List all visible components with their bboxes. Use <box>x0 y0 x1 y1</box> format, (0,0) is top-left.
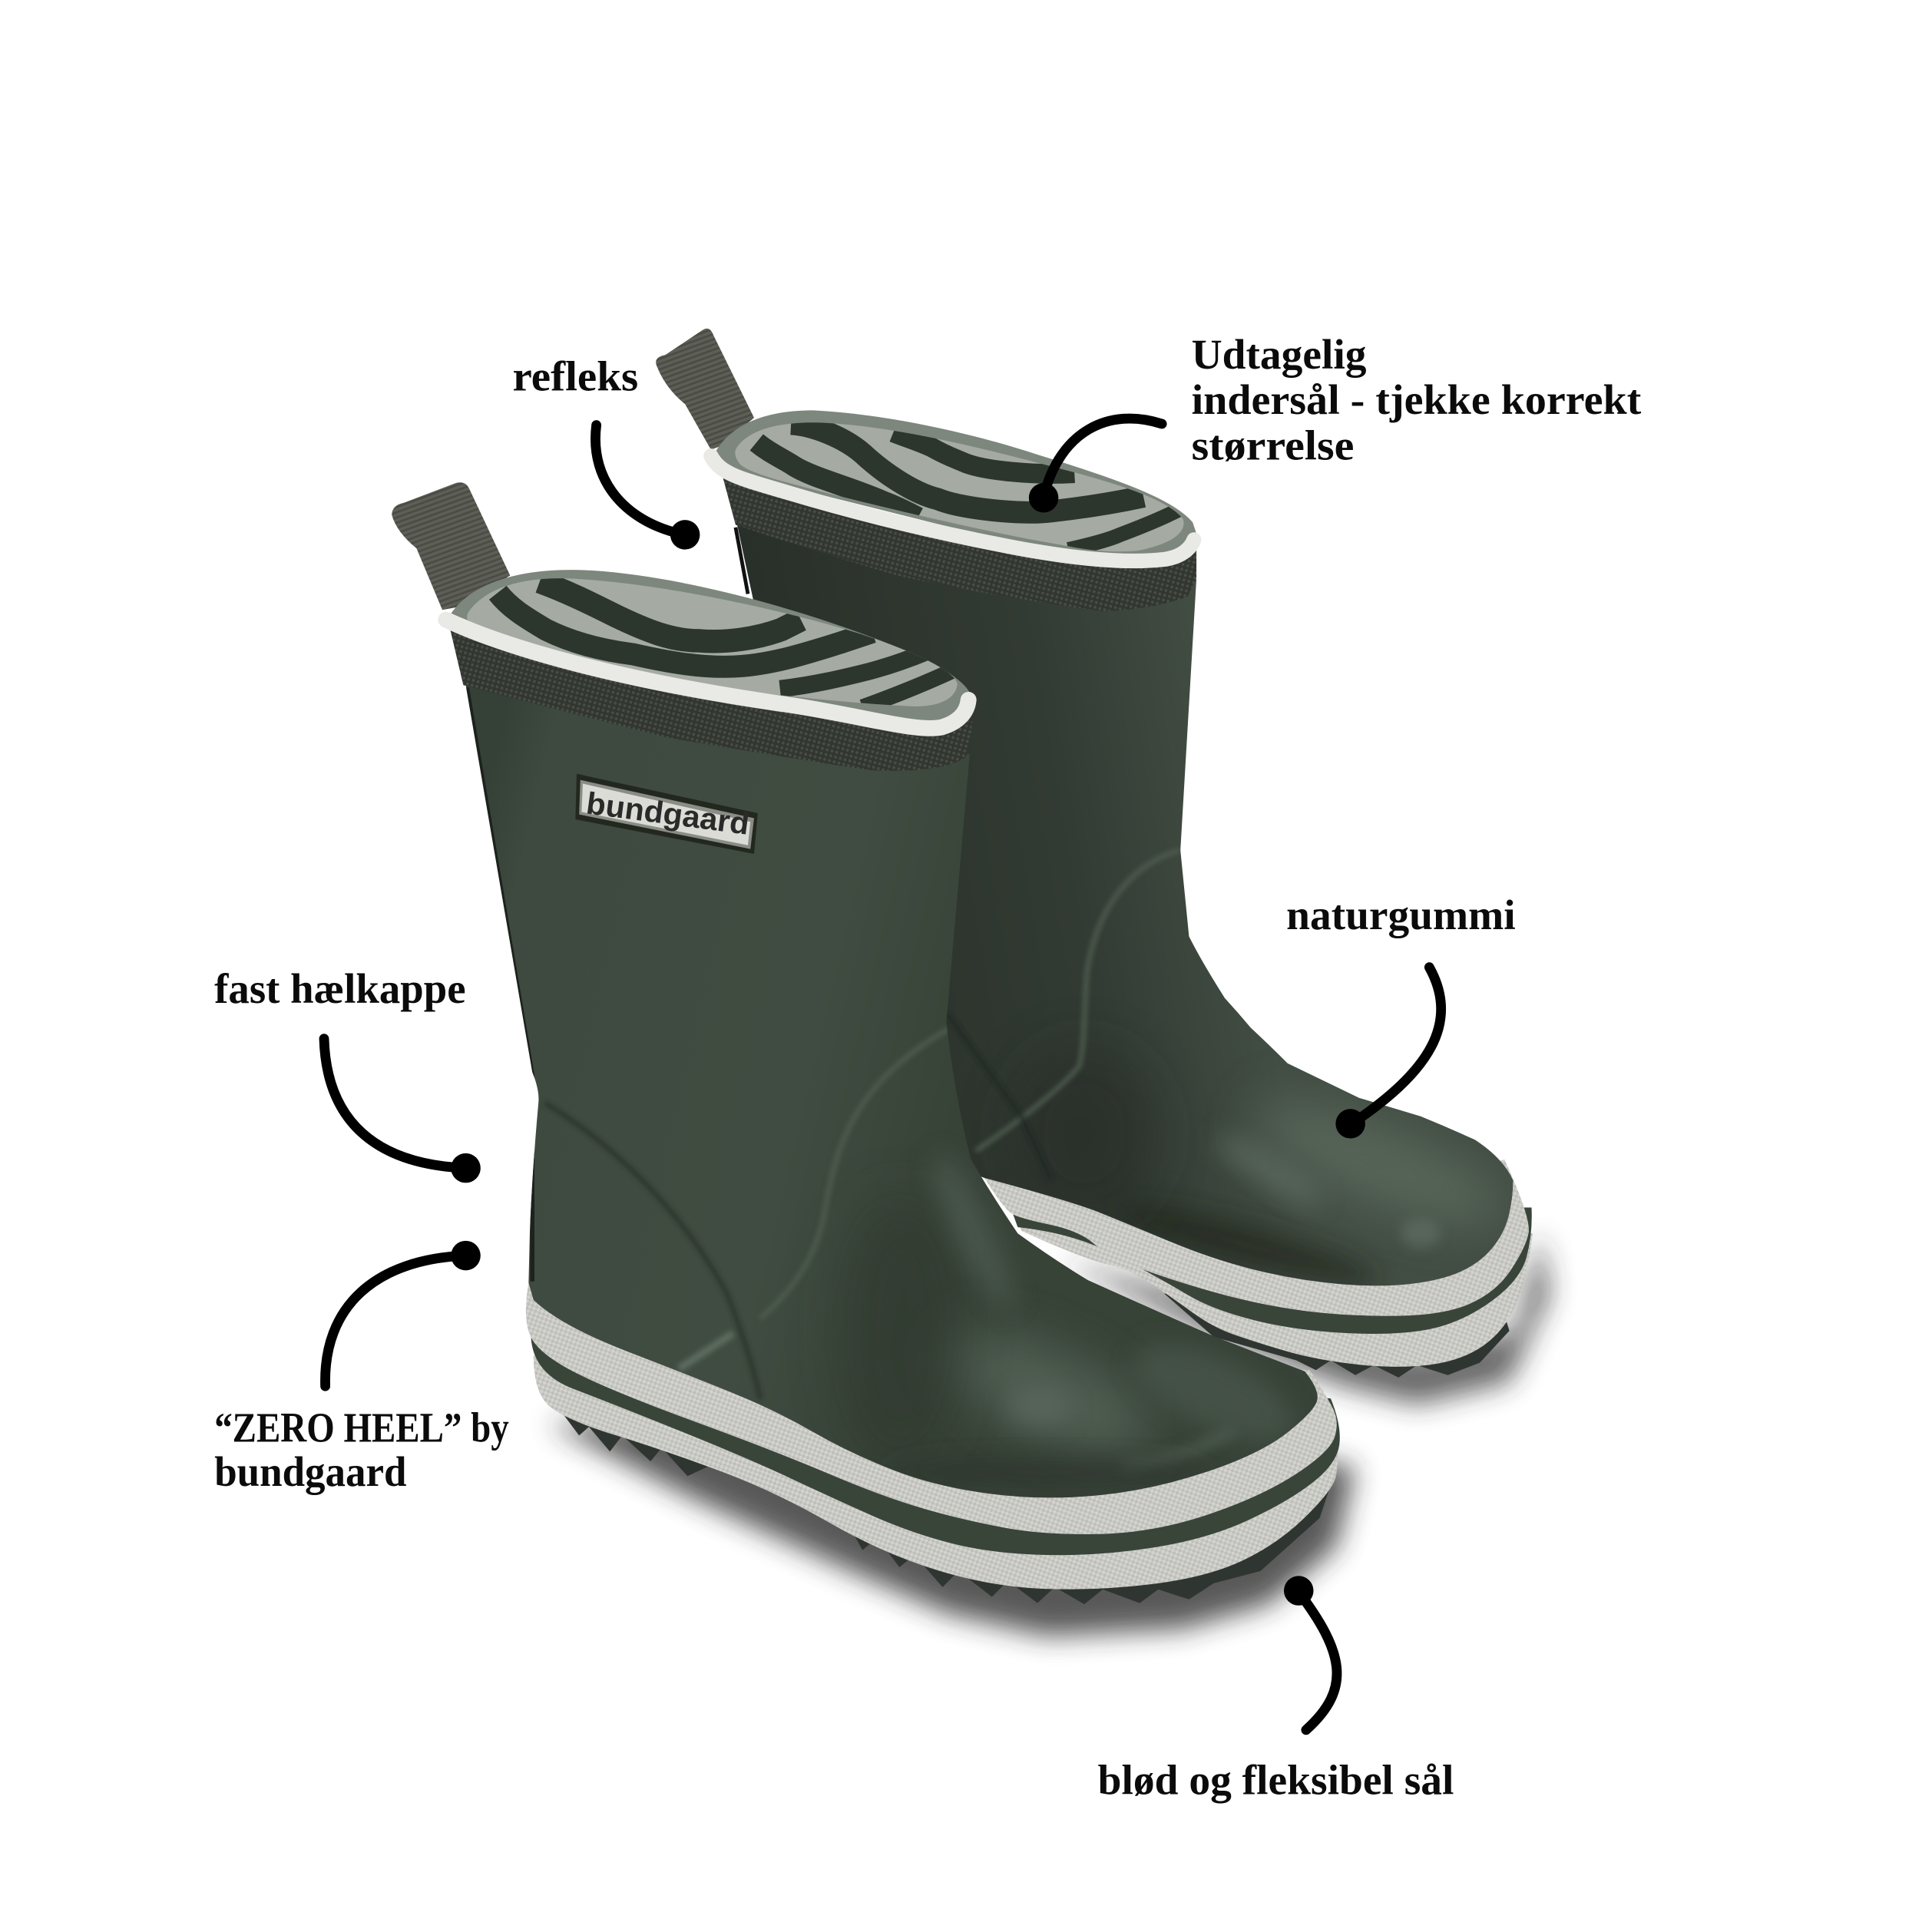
callout: blød og fleksibel sål <box>1098 1576 1454 1803</box>
callout: Udtagelig indersål: størrelse <box>1192 422 1354 469</box>
callout: ZERO HEEL: “ZERO HEEL” by <box>214 1404 509 1451</box>
front boot textured collar <box>448 622 972 771</box>
rear boot <box>656 329 1550 1404</box>
rear boot strap <box>656 329 754 450</box>
callout: ZERO HEEL: bundgaard <box>214 1448 407 1495</box>
front boot shading <box>467 687 1306 1488</box>
callout: ZERO HEEL <box>214 1241 509 1495</box>
front boot upper sole stripe <box>526 1282 1337 1534</box>
brand badge <box>575 774 758 854</box>
rear boot white rim <box>711 456 1194 561</box>
rear boot shading <box>946 850 1520 1298</box>
rear boot body <box>736 518 1513 1285</box>
rear boot inner lining <box>712 410 1198 560</box>
callout: Udtagelig indersål: Udtagelig <box>1192 331 1366 378</box>
rear boot lower sole stripe <box>1017 1207 1533 1367</box>
rear boot heel edge <box>736 528 748 594</box>
callout: refleks: refleks <box>513 353 638 400</box>
front boot body <box>466 685 1318 1497</box>
rear boot shadow <box>1060 1232 1550 1404</box>
front boot <box>392 482 1355 1636</box>
front boot strap <box>392 482 510 610</box>
callout: fast hælkappe: fast hælkappe <box>214 965 466 1012</box>
callout: Udtagelig indersål: indersål - tjekke korrekt <box>1192 376 1641 423</box>
callout: naturgummi: naturgummi <box>1286 892 1516 938</box>
callout: fast hælkappe <box>214 965 481 1183</box>
callout: naturgummi <box>1286 892 1516 1139</box>
rear boot tread <box>1164 1232 1510 1378</box>
rear boot textured collar <box>722 475 1196 611</box>
brand badge: bundgaard <box>584 786 751 842</box>
rear boot dark sole stripe <box>1013 1207 1532 1334</box>
callout: refleks <box>513 353 700 550</box>
front boot striped insole <box>467 578 958 706</box>
rear boot striped insole <box>735 422 1184 551</box>
front boot lower sole stripe <box>534 1355 1338 1590</box>
front boot white rim <box>446 620 968 728</box>
rear boot upper sole stripe <box>984 1160 1529 1316</box>
illustration: pair of rubber boots <box>392 329 1550 1636</box>
callout: Udtagelig indersål <box>1029 331 1641 513</box>
front boot shadow <box>548 1417 1355 1636</box>
front boot inner lining <box>451 570 974 733</box>
front boot dark sole stripe <box>531 1338 1340 1555</box>
front boot tread <box>561 1355 1337 1604</box>
callout: blød og fleksibel sål: blød og fleksibel sål <box>1098 1756 1454 1803</box>
